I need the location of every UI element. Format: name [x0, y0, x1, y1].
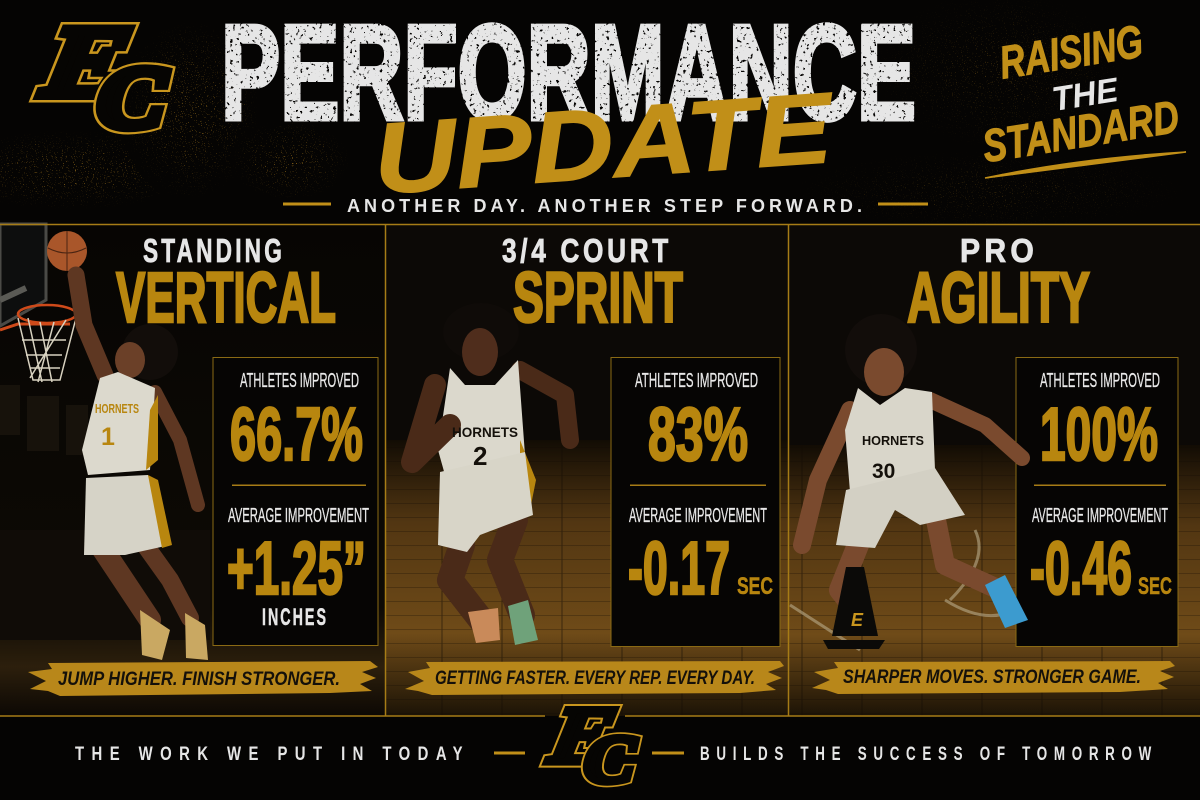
- player 1 dunking: HORNETS: [95, 401, 139, 416]
- logo: EC footer: C: [574, 722, 648, 797]
- banner: getting faster: [405, 661, 784, 695]
- logo: EC top left: E: [29, 6, 149, 117]
- stat box: agility: -0.46: [1030, 526, 1132, 610]
- player 2 sprinting: [412, 303, 570, 645]
- court lines: [790, 530, 1015, 650]
- gym banners: [0, 385, 88, 455]
- panel: pro agility: [788, 224, 1200, 716]
- stat box: vertical: +1.25”: [227, 526, 366, 610]
- banner: jump higher: [28, 661, 378, 696]
- stat box: sprint: AVERAGE IMPROVEMENT: [629, 505, 767, 527]
- icon: cone: [823, 567, 885, 649]
- player 2 sprinting: HORNETS: [452, 424, 518, 440]
- logo: EC top left: [29, 6, 182, 146]
- icon: basketball: [47, 231, 87, 271]
- wood floor: [788, 445, 1200, 716]
- heading: standing vertical: STANDING: [143, 232, 285, 269]
- subtitle: ANOTHER DAY. ANOTHER STEP FORWARD.: [347, 196, 862, 216]
- heading: standing vertical: [116, 232, 336, 338]
- stat box: sprint: -0.17: [628, 526, 730, 610]
- player 2 sprinting: 2: [473, 441, 487, 471]
- wood floor: [386, 440, 788, 716]
- slogan: raising the standard: THE: [1049, 71, 1122, 119]
- heading: 3/4 court sprint: 3/4 COURT: [502, 232, 672, 269]
- heading: 3/4 court sprint: SPRINT: [513, 259, 683, 338]
- heading: pro agility: PRO: [960, 232, 1038, 269]
- stat box: agility: [1016, 358, 1178, 646]
- footer dash: right: [652, 752, 684, 754]
- logo: EC footer: C: [574, 722, 648, 797]
- heading: pro agility: [907, 232, 1090, 338]
- logo: EC top left: C: [85, 49, 182, 146]
- stat box: sprint: ATHLETES IMPROVED: [635, 370, 758, 392]
- footer dash: left: [494, 752, 525, 754]
- icon: backboard and hoop: [0, 224, 76, 382]
- panel borders: [0, 224, 1200, 716]
- icon: cone: E: [851, 610, 864, 630]
- logo: EC top left: E: [29, 6, 149, 117]
- heading: standing vertical: VERTICAL: [116, 259, 336, 338]
- player 1 dunking: [76, 275, 208, 660]
- banner: sharper moves: [812, 661, 1175, 694]
- logo: EC footer: E: [538, 691, 630, 780]
- logo: EC footer: E: [538, 691, 630, 780]
- banner: sharper moves: SHARPER MOVES. STRONGER GAME.: [843, 667, 1141, 688]
- gold dust texture: [0, 0, 1200, 224]
- banner: jump higher: JUMP HIGHER. FINISH STRONGER.: [58, 669, 340, 690]
- heading: 3/4 court sprint: [502, 232, 683, 338]
- slogan: raising the standard: RAISING: [996, 15, 1146, 89]
- stat box: vertical: 66.7%: [230, 392, 363, 476]
- panel: standing vertical: [0, 224, 386, 716]
- stat box: vertical: AVERAGE IMPROVEMENT: [228, 505, 369, 527]
- footer tagline: left: THE WORK WE PUT IN TODAY: [75, 744, 470, 765]
- player 3 defensive slide: [802, 314, 1028, 628]
- heading: pro agility: AGILITY: [907, 259, 1090, 338]
- swoosh underline: [985, 152, 1186, 178]
- stat box: vertical: ATHLETES IMPROVED: [240, 370, 359, 392]
- stat box: vertical: [213, 358, 378, 646]
- stat box: sprint: SEC: [737, 573, 773, 600]
- player 3 defensive slide: 30: [872, 460, 895, 483]
- logo: EC top left: C: [85, 49, 182, 146]
- title: update: UPDATE: [370, 72, 839, 216]
- stat box: sprint: [611, 358, 780, 646]
- footer band: [0, 717, 1200, 800]
- panel: 3/4 court sprint: [386, 224, 788, 716]
- slogan: raising the standard: [966, 11, 1186, 178]
- stat box: sprint: 83%: [648, 392, 748, 476]
- banner: getting faster: GETTING FASTER. EVERY REP. EVERY DAY.: [435, 668, 755, 689]
- player 3 defensive slide: HORNETS: [862, 433, 924, 448]
- stat box: vertical: INCHES: [262, 604, 328, 631]
- stat box: agility: SEC: [1138, 573, 1172, 600]
- player 1 dunking: 1: [101, 423, 115, 451]
